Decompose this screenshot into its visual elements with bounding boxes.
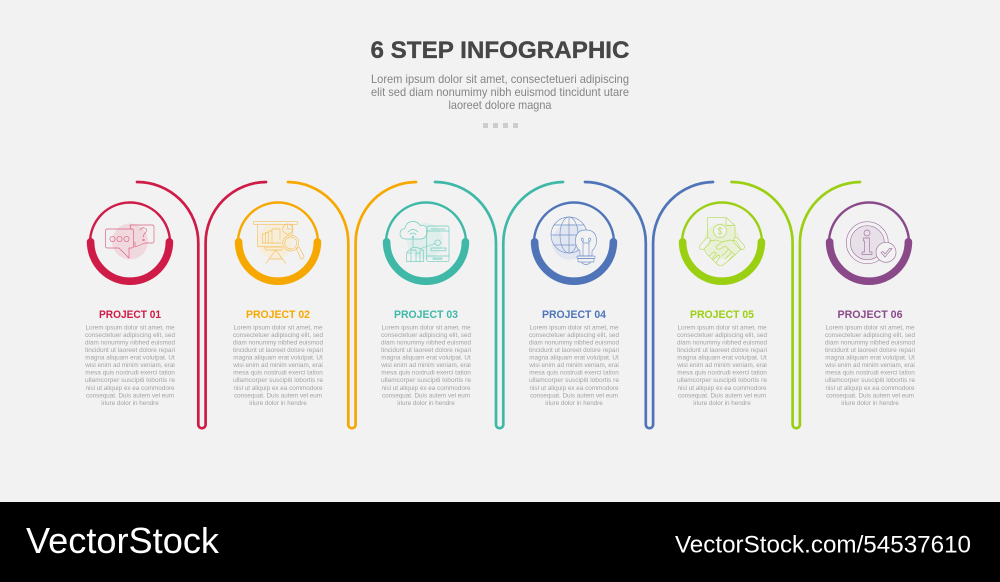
body text 05: consequat. Duis autem vel eum [678, 392, 766, 399]
body text 02: ullamcorper suscipiti lobortis re [233, 377, 323, 384]
body text 05: consectetuer adipiscing elit, sed [677, 332, 767, 339]
body text 05: mesa quis nostrudi exerci tation [677, 370, 767, 377]
body text 04: nisl ut aliquip ex ea commodore [530, 385, 619, 392]
body text 01: tincidunt ut laoreet dolore repari [85, 347, 175, 354]
body text 03: Lorem ipsum dolor sit amet, me [382, 324, 471, 332]
ring 04 [534, 202, 614, 282]
body text 03: tincidunt ut laoreet dolore repari [381, 347, 471, 354]
body text 05 [676, 324, 767, 407]
body text 01: ullamcorper suscipiti lobortis re [85, 377, 175, 384]
body text 01: iriure dolor in hendre [101, 400, 159, 407]
body text 06: Lorem ipsum dolor sit amet, me [826, 324, 915, 332]
body text 05: Lorem ipsum dolor sit amet, me [678, 324, 767, 332]
body text 02: consequat. Duis autem vel eum [234, 392, 322, 399]
body text 03: magna aliquam erat volutpat. Ut [381, 355, 471, 362]
body text 02: magna aliquam erat volutpat. Ut [233, 355, 323, 362]
body text 02: mesa quis nostrudi exerci tation [233, 370, 323, 377]
panel: project 03 [380, 202, 471, 407]
body text 04 [528, 324, 619, 407]
heading 02: PROJECT 02 [246, 309, 310, 321]
body text 05: ullamcorper suscipiti lobortis re [677, 377, 767, 384]
body text 06: tincidunt ut laoreet dolore repari [825, 347, 915, 354]
body text 03 [380, 324, 471, 407]
heading 03: PROJECT 03 [394, 309, 458, 321]
arrow: connector 4 blue [585, 182, 713, 428]
body text 06: consequat. Duis autem vel eum [826, 392, 914, 399]
arrow: connector 3 teal [435, 182, 563, 428]
body text 05: wisi enim ad minim veniam, erai [676, 362, 767, 369]
panel: project 05 [676, 202, 767, 407]
body text 02: wisi enim ad minim veniam, erai [232, 362, 323, 369]
heading 01: PROJECT 01 [99, 309, 161, 321]
body text 02: iriure dolor in hendre [249, 400, 307, 407]
footer url text: VectorStock.com/54537610 [675, 532, 971, 558]
icon: speech bubbles [106, 224, 154, 260]
panel: project 02 [232, 202, 323, 407]
body text 01: Lorem ipsum dolor sit amet, me [86, 324, 175, 332]
body text 04: magna aliquam erat volutpat. Ut [529, 355, 619, 362]
icon: cloud and phone [400, 222, 449, 262]
arrow: connector 1 red [137, 182, 266, 428]
icon: handshake and document [698, 217, 746, 266]
body text 02: nisl ut aliquip ex ea commodore [234, 385, 323, 392]
icon: presentation board [253, 222, 304, 263]
body text 03: consequat. Duis autem vel eum [382, 392, 470, 399]
ring 05 [682, 202, 762, 282]
ring 02 [238, 202, 318, 282]
body text 03: ullamcorper suscipiti lobortis re [381, 377, 471, 384]
body text 04: tincidunt ut laoreet dolore repari [529, 347, 619, 354]
body text 01 [84, 324, 175, 407]
body text 05: magna aliquam erat volutpat. Ut [677, 355, 767, 362]
body text 04: wisi enim ad minim veniam, erai [528, 362, 619, 369]
subtitle text [371, 72, 629, 112]
body text 06: ullamcorper suscipiti lobortis re [825, 377, 915, 384]
title: 6 STEP INFOGRAPHIC [370, 37, 630, 64]
footer bar [0, 502, 1000, 582]
body text 03: diam nonummy nibhed euismod [381, 340, 471, 347]
body text 02 [232, 324, 323, 407]
body text 04: diam nonummy nibhed euismod [529, 340, 619, 347]
body text 05: iriure dolor in hendre [693, 400, 751, 407]
body text 01: magna aliquam erat volutpat. Ut [85, 355, 175, 362]
body text 04: consectetuer adipiscing elit, sed [529, 332, 619, 339]
subtitle text: elit sed diam nonumimy nibh euismod tincidunt utare [371, 85, 629, 99]
arrow: connector 2 yellow [288, 182, 416, 428]
body text 03: mesa quis nostrudi exerci tation [381, 370, 471, 377]
body text 06: iriure dolor in hendre [841, 400, 899, 407]
footer logo text: VectorStock [26, 520, 220, 561]
body text 02: tincidunt ut laoreet dolore repari [233, 347, 323, 354]
subtitle text: laoreet dolore magna [448, 98, 552, 112]
body text 01: nisl ut aliquip ex ea commodore [86, 385, 175, 392]
panel: project 01 [84, 202, 175, 407]
body text 01: mesa quis nostrudi exerci tation [85, 370, 175, 377]
body text 02: consectetuer adipiscing elit, sed [233, 332, 323, 339]
body text 04: Lorem ipsum dolor sit amet, me [530, 324, 619, 332]
body text 03: iriure dolor in hendre [397, 400, 455, 407]
heading 05: PROJECT 05 [690, 309, 754, 321]
panel: project 04 [528, 202, 619, 407]
body text 01: wisi enim ad minim veniam, erai [84, 362, 175, 369]
body text 04: mesa quis nostrudi exerci tation [529, 370, 619, 377]
body text 03: nisl ut aliquip ex ea commodore [382, 385, 471, 392]
heading 04: PROJECT 04 [542, 309, 607, 321]
body text 06: magna aliquam erat volutpat. Ut [825, 355, 915, 362]
body text 01: diam nonummy nibhed euismod [85, 340, 175, 347]
body text 01: consequat. Duis autem vel eum [86, 392, 174, 399]
ring 06 [829, 202, 909, 282]
ring 01 [90, 202, 170, 282]
icon: globe and bulb [551, 217, 596, 264]
body text 06: wisi enim ad minim veniam, erai [824, 362, 915, 369]
subtitle text: Lorem ipsum dolor sit amet, consectetueri adipiscing [371, 72, 629, 86]
body text 01: consectetuer adipiscing elit, sed [85, 332, 175, 339]
body text 05: tincidunt ut laoreet dolore repari [677, 347, 767, 354]
ring 03 [386, 202, 466, 282]
body text 04: iriure dolor in hendre [545, 400, 603, 407]
body text 02: diam nonummy nibhed euismod [233, 340, 323, 347]
body text 06: diam nonummy nibhed euismod [825, 340, 915, 347]
body text 03: wisi enim ad minim veniam, erai [380, 362, 471, 369]
arrow: connector 5 green [732, 182, 860, 428]
body text 02: Lorem ipsum dolor sit amet, me [234, 324, 323, 332]
body text 06: nisl ut aliquip ex ea commodore [826, 385, 915, 392]
heading 06: PROJECT 06 [838, 309, 902, 321]
body text 05: diam nonummy nibhed euismod [677, 340, 767, 347]
body text 04: consequat. Duis autem vel eum [530, 392, 618, 399]
body text 06 [824, 324, 915, 407]
icon: info coin with check [846, 222, 896, 264]
body text 04: ullamcorper suscipiti lobortis re [529, 377, 619, 384]
body text 06: mesa quis nostrudi exerci tation [825, 370, 915, 377]
body text 06: consectetuer adipiscing elit, sed [825, 332, 915, 339]
body text 03: consectetuer adipiscing elit, sed [381, 332, 471, 339]
pagination dots [483, 123, 518, 128]
panel: project 06 [824, 202, 915, 407]
body text 05: nisl ut aliquip ex ea commodore [678, 385, 767, 392]
